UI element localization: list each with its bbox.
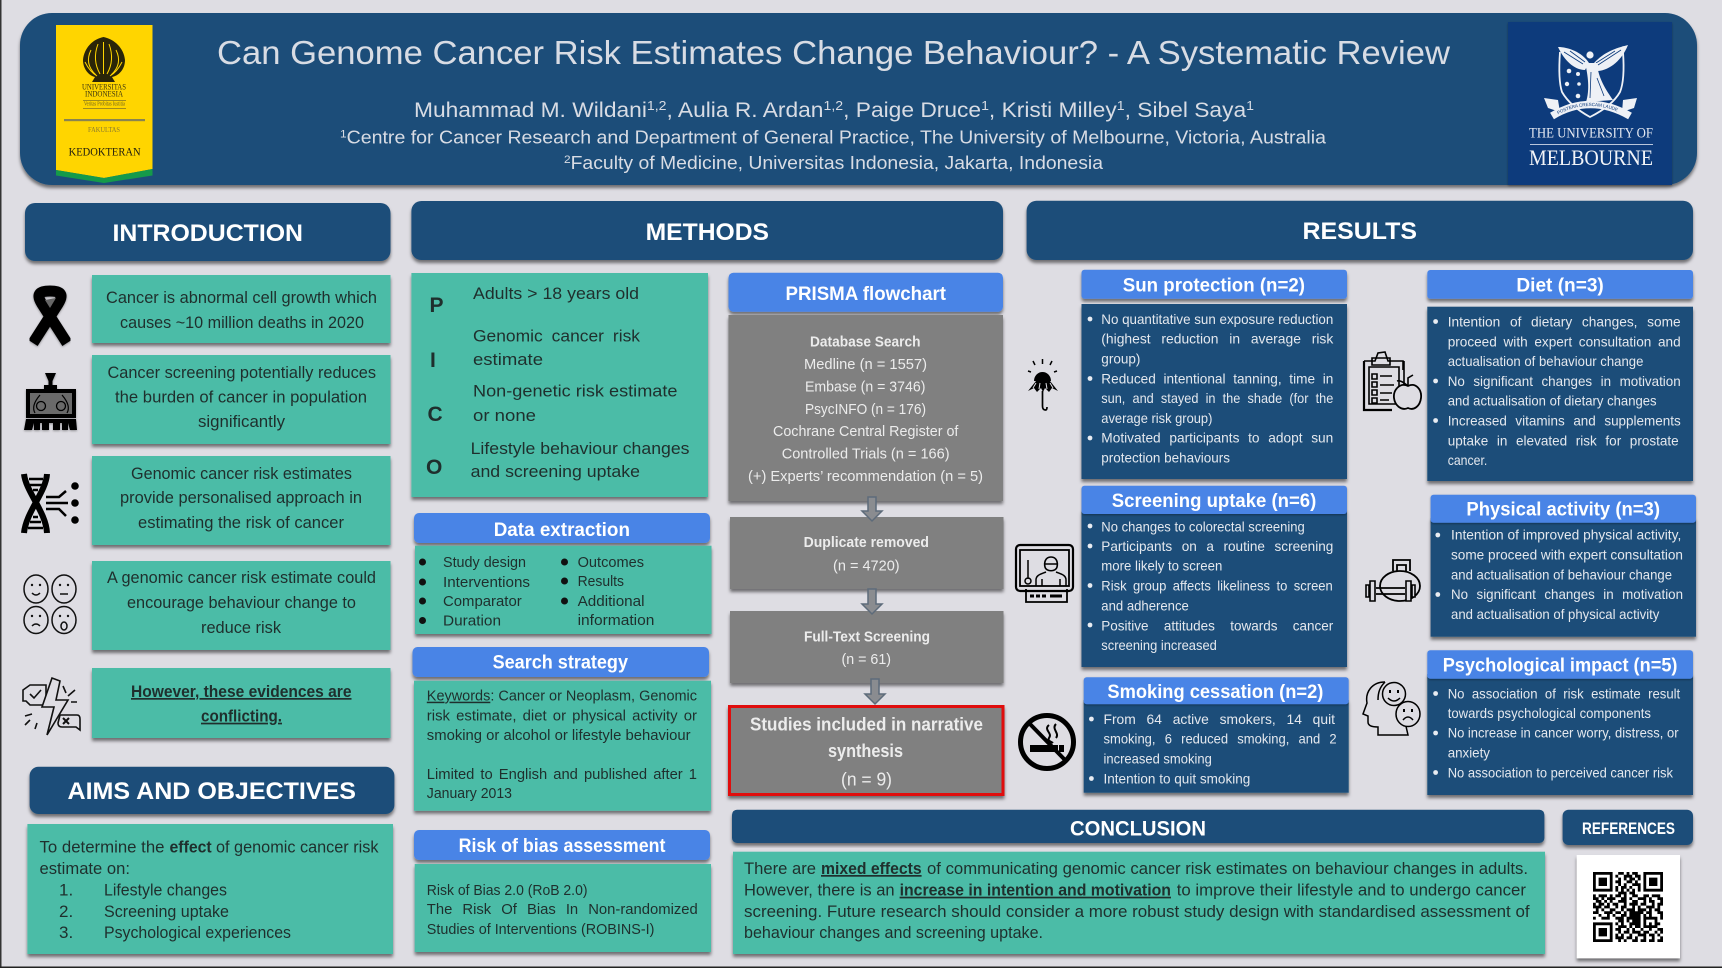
heading: results (1027, 201, 1693, 260)
subheading: risk of bias assessment (414, 830, 710, 860)
list: psychological impact (1427, 674, 1693, 795)
text: cancer definition: Cancer is abnormal cell growth which (106, 288, 377, 307)
list: psychological impact: No increase in cancer worry, distress, or (1448, 725, 1679, 741)
QR code (1577, 855, 1680, 958)
logo: Universitas Indonesia: KEDOKTERAN (69, 146, 141, 158)
panel: diet (1427, 270, 1693, 481)
panel: aims and objectives (27, 767, 394, 954)
list: data extraction: information (578, 612, 654, 629)
flow box: database search: Controlled Trials (n = 166) (782, 446, 950, 463)
flow box: studies included: (n = 9) (841, 770, 892, 790)
PICO box: Adults > 18 years old (473, 284, 639, 303)
text: aims list: Screening uptake (104, 902, 229, 921)
list: data extraction (415, 546, 712, 634)
PICO box: P (430, 294, 444, 317)
heading: methods: METHODS (646, 219, 769, 246)
text: cancer definition (92, 275, 390, 343)
list: diet: proceed with expert consultation and (1448, 333, 1681, 349)
text: search strategy (414, 681, 711, 811)
text: aims list: Psychological experiences (104, 923, 291, 942)
list: physical activity: and actualisation of physical activity (1451, 606, 1659, 622)
text: risk of bias: The Risk Of Bias In Non-randomized (427, 901, 698, 918)
text: search strategy: January 2013 (427, 785, 512, 802)
flow box: database search: (+) Experts’ recommendation (n = 5) (748, 468, 983, 485)
text: risk of bias (415, 864, 711, 952)
list: physical activity: No significant changes in motivation (1451, 586, 1683, 602)
text: conclusion: screening. Future research should consider a more robust study design with standardised assessment of (744, 902, 1530, 921)
heading: methods (411, 201, 1003, 260)
list: data extraction: Interventions (443, 574, 530, 591)
icon: no smoking (1020, 716, 1074, 768)
heading: conclusion: CONCLUSION (1070, 818, 1206, 841)
flow box: full-text screening: Full-Text Screening (804, 629, 930, 646)
text: search strategy: Keywords: Cancer or Neoplasm, Genomic (427, 688, 697, 705)
subheading: search strategy: Search strategy (493, 652, 628, 674)
panel: sun protection (1082, 270, 1347, 479)
subheading: search strategy (412, 647, 709, 677)
affiliation 2: 2 (564, 154, 571, 166)
list: screening uptake: more likely to screen (1101, 558, 1222, 574)
text: behaviour change (92, 561, 390, 650)
list: diet: uptake in elevated risk for prostate (1448, 432, 1679, 448)
panel: references (1563, 810, 1693, 958)
list: smoking cessation: increased smoking (1104, 750, 1212, 766)
flow box: database search: Embase (n = 3746) (805, 379, 925, 396)
list: psychological impact: anxiety (1448, 744, 1490, 760)
PICO box (411, 273, 708, 497)
arrow: screening to included (865, 679, 885, 704)
icon: dna (24, 474, 79, 533)
list: physical activity: Intention of improved physical activity, (1451, 527, 1681, 543)
text: behaviour change: A genomic cancer risk estimate could (107, 568, 376, 587)
flow box: database search (728, 315, 1003, 501)
list: sun protection: group) (1101, 351, 1140, 367)
callout: conflicting evidence (92, 668, 390, 738)
list: smoking cessation: From 64 active smokers, 14 quit (1104, 711, 1335, 727)
icon: screening monitor (1016, 545, 1073, 602)
logo: Universitas Indonesia: UNIVERSITAS (82, 82, 126, 92)
icon: breast screening (24, 373, 77, 430)
logo: University of Melbourne (1507, 22, 1673, 187)
header banner (18, 13, 1700, 190)
icon: dumbbell and kettlebell (1366, 560, 1420, 601)
text: conclusion: to improve their lifestyle and to undergo cancer (1177, 881, 1526, 900)
list: psychological impact: No association of risk estimate result (1448, 685, 1680, 701)
callout: conflicting evidence: However, these evidences are (131, 682, 352, 701)
authors: Muhammad M. Wildani (414, 99, 629, 122)
list: screening uptake: No changes to colorectal screening (1101, 518, 1305, 534)
authors: 1 (981, 98, 989, 113)
heading: references: REFERENCES (1582, 819, 1675, 838)
list: data extraction: Comparator (443, 593, 522, 610)
list: data extraction: Study design (443, 554, 526, 571)
text: search strategy: Limited to English and published after 1 (427, 766, 697, 783)
list: physical activity (1431, 518, 1696, 637)
flow box: database search: PsycINFO (n = 176) (805, 401, 926, 418)
list: data extraction: Outcomes (578, 554, 644, 571)
logo: Universitas Indonesia: FAKULTAS (88, 125, 120, 134)
text: aims list: estimate on: (40, 859, 130, 878)
text: conclusion: There are (744, 859, 816, 878)
text: search strategy: smoking or alcohol or lifestyle behaviour (427, 727, 691, 744)
subheading: physical activity (1431, 495, 1696, 523)
PRISMA flowchart (728, 273, 1004, 794)
subheading: data extraction (414, 513, 710, 543)
flow box: duplicate removed (730, 517, 1004, 589)
list: data extraction: Results (578, 573, 624, 590)
text: aims list: effect (170, 838, 212, 857)
list: data extraction: Additional (578, 593, 644, 610)
list: smoking cessation (1084, 700, 1349, 793)
subheading: diet: Diet (n=3) (1516, 276, 1604, 297)
icon: conflicting evidence (23, 678, 80, 735)
text: screening (92, 355, 390, 444)
panel: conclusion (732, 810, 1545, 954)
subheading: diet (1427, 270, 1693, 299)
panel: screening uptake (1082, 486, 1347, 667)
panel: psychological impact (1427, 650, 1693, 795)
text: genomic estimates: estimating the risk of cancer (138, 513, 344, 532)
list: screening uptake: Positive attitudes towards cancer (1101, 617, 1334, 633)
list: sun protection (1082, 304, 1347, 479)
arrow: duplicates to screening (862, 589, 882, 614)
text: conclusion: behaviour changes and screening uptake. (744, 923, 1043, 942)
text: genomic estimates: provide personalised approach in (120, 488, 362, 507)
PICO box: estimate (473, 350, 543, 369)
logo: University of Melbourne: POSTERA CRESCAM LAUDE (1557, 102, 1618, 114)
list: smoking cessation: smoking, 6 reduced smoking, and 2 (1104, 731, 1337, 747)
authors: , Paige Druce (843, 99, 981, 122)
PICO box: and screening uptake (471, 462, 640, 481)
list: sun protection: sun, and stayed in the shade (for the (1101, 390, 1333, 406)
PICO box: Lifestyle behaviour changes (471, 439, 690, 458)
flow box: studies included: synthesis (828, 741, 903, 761)
list: diet: actualisation of behaviour change (1448, 353, 1644, 369)
list: diet: cancer. (1448, 452, 1487, 468)
list: sun protection: Motivated participants to adopt sun (1101, 430, 1333, 446)
list: sun protection: average risk group) (1101, 410, 1212, 426)
list: sun protection: Reduced intentional tanning, time in (1101, 370, 1333, 386)
authors: 1 (1246, 98, 1254, 113)
panel: physical activity (1431, 495, 1696, 637)
authors: 1 (1117, 98, 1125, 113)
logo: Universitas Indonesia: INDONESIA (85, 88, 124, 98)
flow box: duplicate removed: Duplicate removed (804, 534, 929, 551)
heading: results: RESULTS (1302, 218, 1417, 245)
heading: references (1563, 810, 1693, 845)
text: screening: significantly (198, 412, 285, 431)
text: aims list: 2. (59, 902, 73, 921)
text: cancer definition: causes ~10 million deaths in 2020 (120, 313, 364, 332)
list: diet: Intention of dietary changes, some (1448, 314, 1681, 330)
text: behaviour change: encourage behaviour change to (127, 593, 356, 612)
list: screening uptake: Risk group affects likeliness to screen (1101, 578, 1333, 594)
subheading: PRISMA flowchart (728, 273, 1003, 312)
subheading: sun protection: Sun protection (n=2) (1123, 276, 1305, 297)
icon: head with faces (1363, 682, 1420, 735)
flow box: database search: Medline (n = 1557) (804, 356, 927, 373)
list: data extraction: Duration (443, 613, 501, 630)
PICO box: Non-genetic risk estimate (473, 382, 678, 401)
list: diet: Increased vitamins and supplements (1448, 413, 1681, 429)
text: genomic estimates: Genomic cancer risk estimates (131, 464, 352, 483)
text: conclusion: However, there is an (744, 881, 895, 900)
authors: 1,2 (824, 98, 843, 113)
list: screening uptake (1082, 510, 1347, 667)
text: aims list: To determine the (40, 838, 164, 857)
title: Can Genome Cancer Risk Estimates Change Behaviour? - A Systematic Review (217, 34, 1450, 71)
affiliation 2: Faculty of Medicine, Universitas Indonesia, Jakarta, Indonesia (571, 153, 1104, 173)
text: aims list: Lifestyle changes (104, 881, 227, 900)
list: sun protection: (highest reduction in average risk (1101, 331, 1334, 347)
text: conclusion: mixed effects (821, 859, 922, 878)
callout: conflicting evidence: conflicting. (201, 707, 282, 726)
flow box: studies included (730, 706, 1003, 794)
logo: Universitas Indonesia: Veritas Probitas Iustitia (84, 102, 125, 108)
panel: results (1016, 201, 1696, 795)
authors: , Kristi Milley (989, 99, 1117, 122)
subheading: physical activity: Physical activity (n=3) (1466, 500, 1660, 521)
list: physical activity: and actualisation of behaviour change (1451, 566, 1672, 582)
subheading: smoking cessation (1084, 677, 1349, 704)
subheading: PRISMA flowchart: PRISMA flowchart (786, 284, 947, 305)
text: aims list (27, 824, 393, 954)
text: genomic estimates (92, 456, 390, 545)
text: conclusion: increase in intention and motivation (900, 881, 1171, 900)
logo: University of Melbourne: THE UNIVERSITY OF (1529, 126, 1653, 142)
subheading: data extraction: Data extraction (494, 520, 630, 541)
panel: smoking cessation (1084, 677, 1349, 793)
authors: 1,2 (647, 98, 666, 113)
text: aims list: 3. (59, 923, 73, 942)
text: screening: the burden of cancer in population (115, 388, 367, 406)
heading: introduction: INTRODUCTION (112, 220, 303, 247)
PICO box: Genomic cancer risk (473, 327, 641, 346)
text: aims list: 1. (59, 881, 73, 900)
list: diet: No significant changes in motivation (1448, 373, 1681, 389)
subheading: screening uptake: Screening uptake (n=6) (1112, 491, 1316, 512)
affiliation 1: Centre for Cancer Research and Department of General Practice, The University of Melbourne, Victoria, Australia (347, 128, 1327, 148)
subheading: smoking cessation: Smoking cessation (n=2) (1107, 682, 1323, 703)
panel: methods (411, 201, 1003, 952)
list: psychological impact: towards psychological components (1448, 705, 1651, 721)
list: screening uptake: Participants on a routine screening (1101, 538, 1333, 554)
list: screening uptake: screening increased (1101, 637, 1217, 653)
text: screening: Cancer screening potentially reduces (108, 363, 376, 382)
list: smoking cessation: Intention to quit smoking (1104, 770, 1250, 786)
heading: aims and objectives: AIMS AND OBJECTIVES (68, 778, 356, 805)
list: diet (1427, 307, 1693, 481)
text: aims list: of genomic cancer risk (216, 838, 379, 857)
subheading: psychological impact (1427, 650, 1693, 679)
heading: aims and objectives (30, 767, 394, 814)
text: risk of bias: Risk of Bias 2.0 (RoB 2.0) (427, 882, 588, 899)
icon: four faces (24, 575, 76, 634)
flow box: full-text screening (730, 611, 1004, 683)
affiliation 1: 1 (340, 128, 347, 140)
list: psychological impact: No association to perceived cancer risk (1448, 764, 1674, 780)
panel: introduction (23, 203, 390, 738)
subheading: sun protection (1082, 270, 1347, 299)
text: conclusion: of communicating genomic cancer risk estimates on behaviour changes in adults. (927, 859, 1528, 878)
list: screening uptake: and adherence (1101, 597, 1189, 613)
PICO box: O (426, 456, 442, 479)
list: physical activity: some proceed with expert consultation (1451, 546, 1683, 562)
icon: cancer ribbon (33, 291, 67, 343)
PICO box: C (428, 403, 443, 426)
flow box: full-text screening: (n = 61) (842, 651, 891, 668)
subheading: psychological impact: Psychological impact (n=5) (1443, 656, 1678, 677)
list: sun protection: protection behaviours (1101, 450, 1230, 466)
text: behaviour change: reduce risk (201, 618, 281, 637)
PICO box: or none (473, 406, 536, 425)
icon: clipboard and apple (1364, 352, 1421, 410)
list: diet: and actualisation of dietary changes (1448, 393, 1657, 409)
logo: Universitas Indonesia (56, 25, 152, 183)
text: search strategy: risk estimate, diet or physical activity or (427, 708, 697, 725)
heading: conclusion (732, 810, 1544, 843)
flow box: studies included: Studies included in narrative (750, 715, 983, 735)
authors: , Aulia R. Ardan (666, 99, 824, 122)
text: conclusion (733, 852, 1545, 954)
PICO box: I (430, 349, 436, 372)
subheading: risk of bias assessment: Risk of bias assessment (459, 836, 666, 857)
icon: umbrella (1028, 359, 1058, 410)
flow box: database search: Cochrane Central Register of (773, 423, 959, 440)
arrow: search to duplicates (862, 497, 882, 521)
list: sun protection: No quantitative sun exposure reduction (1101, 311, 1333, 327)
flow box: duplicate removed: (n = 4720) (833, 558, 900, 575)
authors: , Sibel Saya (1125, 99, 1246, 122)
logo: University of Melbourne: MELBOURNE (1529, 145, 1653, 170)
heading: introduction (25, 203, 390, 261)
subheading: screening uptake (1082, 486, 1347, 514)
flow box: database search: Database Search (810, 334, 920, 351)
text: risk of bias: Studies of Interventions (ROBINS-I) (427, 921, 654, 938)
